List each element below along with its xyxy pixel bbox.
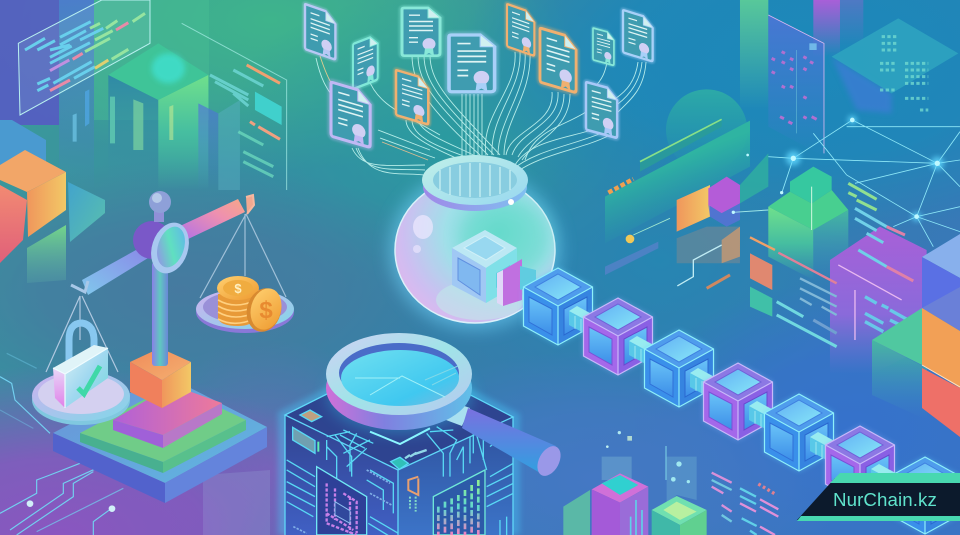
hook left: [71, 281, 88, 292]
chain link 6: [810, 432, 842, 464]
block 6: [764, 394, 834, 471]
circuit cube: [278, 352, 520, 535]
block 4: [644, 330, 714, 407]
right pan with coins: [196, 214, 294, 336]
icon: document 4: [449, 35, 495, 92]
top-left vertical bands: [0, 0, 209, 190]
left beam: [82, 245, 148, 295]
panel: floating plate: [832, 18, 958, 113]
icon: coin: $: [259, 297, 273, 324]
translucent block under base: [203, 470, 270, 535]
icon: document 1: [305, 4, 335, 60]
panel: green tower right: [768, 167, 848, 283]
icon: document 5: [507, 4, 534, 56]
icon: document 10: [396, 70, 428, 125]
small bottom blocks: [563, 431, 707, 535]
jar rim: [422, 155, 528, 211]
blue base: [53, 375, 267, 503]
icon: document 11: [586, 82, 617, 138]
colour squares: [750, 253, 772, 317]
icon: document 7: [593, 28, 614, 66]
right side isometric city: [605, 0, 960, 373]
icon: dome: [666, 89, 747, 171]
icon: document 6: [540, 28, 576, 93]
panel: orange and magenta blocks: [677, 153, 768, 288]
glass jar: [389, 155, 561, 330]
panel: purple strip: [813, 0, 863, 57]
icon: document 9: [331, 82, 370, 147]
block 7: [826, 426, 894, 503]
pink step: [113, 385, 222, 448]
block inside jar: [452, 230, 536, 306]
magnifying glass: [326, 333, 565, 480]
circuit traces bottom left: [0, 353, 123, 535]
post: [152, 262, 168, 366]
handle: [446, 402, 565, 480]
block 8: [890, 457, 960, 534]
chain link 5: [749, 401, 781, 433]
left pan with lock: [32, 296, 130, 425]
panel: purple block: [830, 227, 927, 373]
icon: document 3: [402, 8, 440, 56]
colour cubes right: [872, 234, 960, 437]
chain link 4: [690, 368, 722, 400]
panel: data window top left: [182, 23, 287, 190]
chain link 3: [629, 336, 661, 368]
pivot head: [133, 191, 195, 278]
brand badge: [797, 473, 960, 521]
text bars bottom right: [712, 473, 778, 535]
circuit traces: [287, 410, 513, 535]
network graph: [732, 115, 960, 247]
brand badge: NurChain.kz: [833, 489, 937, 510]
hook right: [246, 195, 254, 214]
colour cubes left: [0, 120, 105, 283]
dashboard bars: [605, 118, 750, 275]
scale stand: [71, 191, 254, 366]
wires from jar to documents: [316, 48, 646, 176]
icon: coin stack: $: [234, 281, 242, 296]
panel: tall green band: [740, 0, 768, 110]
text bars: [750, 183, 913, 347]
panel: code window top left: [18, 0, 150, 115]
orange block: [130, 348, 191, 408]
right beam: [180, 199, 245, 240]
icon: document 2: [353, 34, 378, 89]
panel: glass data sheet: [768, 15, 824, 157]
panel: green tower: [73, 43, 240, 190]
green step: [80, 385, 246, 473]
scale base: [53, 348, 267, 503]
documents: [305, 4, 653, 147]
icon: document 8: [623, 10, 653, 62]
chain link 7: [871, 464, 903, 496]
chain link 2: [569, 306, 601, 338]
lens: [339, 343, 459, 406]
block 3: [584, 298, 652, 375]
block 2: [524, 268, 592, 345]
block 5: [704, 363, 772, 440]
blockchain cubes: [524, 268, 960, 534]
ring: [326, 346, 472, 430]
icon: padlock: [53, 323, 108, 408]
